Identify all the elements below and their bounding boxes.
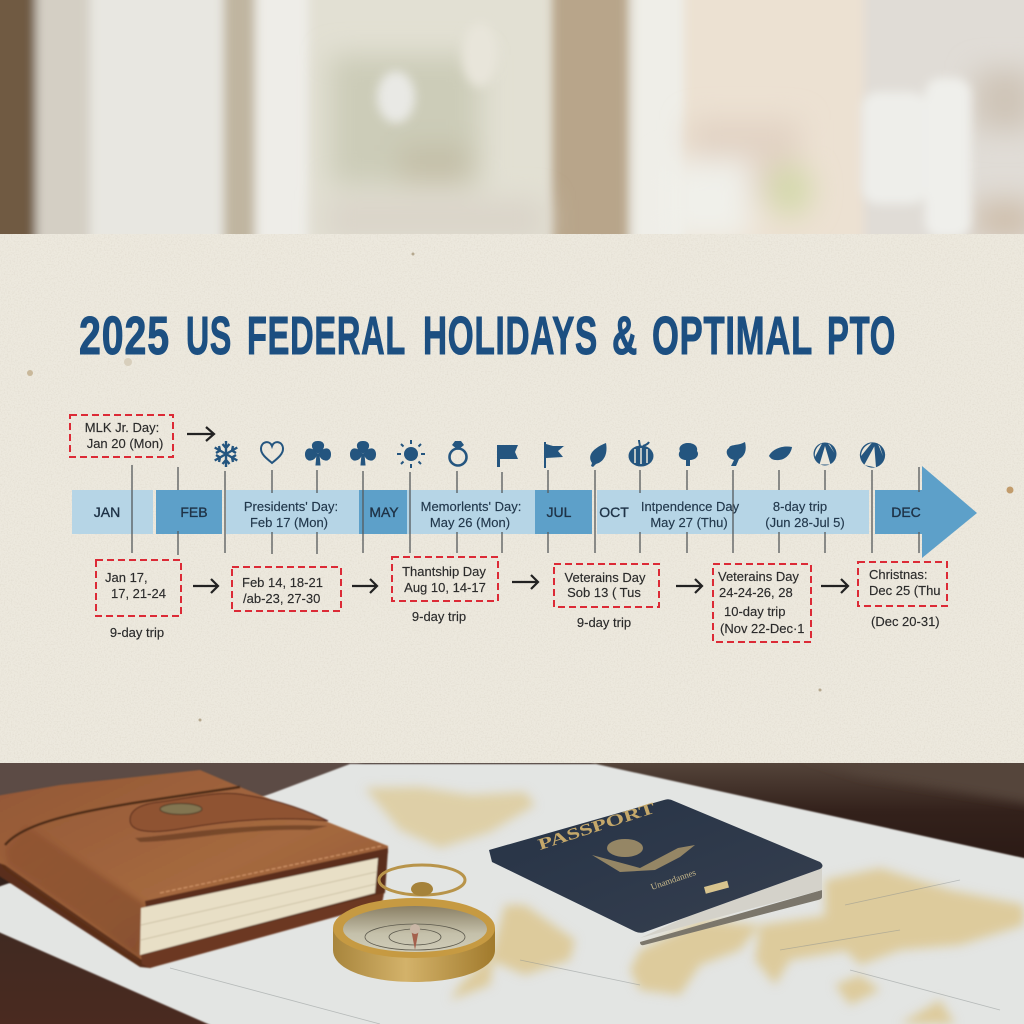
label: 9-day trip: 9-day trip xyxy=(412,609,466,624)
title: 2025 xyxy=(79,307,170,366)
callout: Thanksgiving xyxy=(392,557,498,601)
callout: Christmas: Dec 25 (Thu xyxy=(869,583,941,598)
segment: OCT and Independence Day: Intpendence Day xyxy=(641,499,740,514)
icon: pennant flag xyxy=(544,442,564,468)
callout: MLK Jr. Day: Jan 20 (Mon) xyxy=(87,436,163,451)
callout: February dates xyxy=(232,567,341,611)
segment: MAY: MAY xyxy=(369,504,399,520)
callout: Veterans Day: Veterains Day xyxy=(565,570,646,585)
callout: February dates: /ab-23, 27-30 xyxy=(243,591,320,606)
title: HOLIDAYS xyxy=(423,307,598,366)
segment: OCT and Independence Day: OCT xyxy=(599,504,629,520)
photo: blurred window background xyxy=(0,0,1024,260)
icon: flag xyxy=(497,445,518,467)
segment: JAN xyxy=(72,490,153,534)
icon: ring xyxy=(450,441,466,466)
callout: February dates: Feb 14, 18-21 xyxy=(242,575,323,590)
callout: Veterans Day 10-day trip: 24-24-26, 28 xyxy=(719,585,793,600)
callout: Veterans Day 10-day trip xyxy=(713,564,811,642)
segment: Presidents' Day xyxy=(226,490,359,534)
compass xyxy=(333,865,495,982)
arrow xyxy=(512,575,538,589)
segment: DEC arrow: DEC xyxy=(891,504,921,520)
notebook xyxy=(0,770,388,968)
callout: MLK Jr. Day xyxy=(70,415,173,457)
callout: January dates xyxy=(96,560,181,616)
segment: OCT and Independence Day: (Jun 28-Jul 5) xyxy=(765,515,845,530)
passport xyxy=(489,799,822,945)
callout: Christmas xyxy=(858,562,947,606)
callout: Thanksgiving: Thantship Day xyxy=(402,564,486,579)
segment: JUL: JUL xyxy=(547,504,572,520)
icon: sun xyxy=(397,440,425,468)
photo: travel desk scene xyxy=(0,755,1024,1024)
icon: beach ball xyxy=(814,442,836,466)
title: & xyxy=(612,307,638,366)
segment: OCT and Independence Day: May 27 (Thu) xyxy=(650,515,728,530)
title: PTO xyxy=(827,307,896,366)
callout: Veterans Day 10-day trip: Veterains Day xyxy=(718,569,799,584)
icon: tree xyxy=(679,443,698,466)
callout: Veterans Day 10-day trip: (Nov 22-Dec·1 xyxy=(720,621,805,636)
icon: heart xyxy=(261,442,283,463)
icon row xyxy=(215,440,888,470)
icon: clover xyxy=(305,441,331,465)
timeline bar with month segments xyxy=(72,466,977,558)
segment: Memorial Day: May 26 (Mon) xyxy=(430,515,510,530)
title: FEDERAL xyxy=(247,307,406,366)
icon: leaf xyxy=(590,443,607,467)
passport subtitle: Unamdannes xyxy=(649,867,698,892)
icon: flat leaf xyxy=(769,446,792,460)
title: US xyxy=(186,307,232,366)
callout: MLK Jr. Day: MLK Jr. Day: xyxy=(85,420,159,435)
connector lines xyxy=(132,465,919,555)
segment: Presidents' Day: Presidents' Day: xyxy=(244,499,338,514)
label: 9-day trip: 9-day trip xyxy=(110,625,164,640)
arrow xyxy=(187,427,214,441)
icon: beach ball xyxy=(857,440,888,470)
arrow xyxy=(352,579,377,593)
arrow xyxy=(676,579,702,593)
segment: MAY xyxy=(359,490,407,534)
map xyxy=(0,764,1024,1024)
title: OPTIMAL xyxy=(652,307,813,366)
callout: January dates: 17, 21-24 xyxy=(111,586,166,601)
segment: OCT and Independence Day: 8-day trip xyxy=(773,499,827,514)
callout: Christmas: Christnas: xyxy=(869,567,928,582)
callout: Veterans Day: Sob 13 ( Tus xyxy=(567,585,641,600)
segment: DEC arrow xyxy=(875,466,977,558)
icon: snowflake xyxy=(215,441,237,467)
segment: OCT and Independence Day xyxy=(597,490,869,534)
segment: Memorial Day xyxy=(407,490,535,534)
label: Dec 20-31: (Dec 20-31) xyxy=(871,614,940,629)
segment: FEB xyxy=(156,490,222,534)
segment: FEB: FEB xyxy=(180,504,208,520)
segment: JAN: JAN xyxy=(94,504,120,520)
passport title: PASSPORT xyxy=(536,800,658,854)
icon: pumpkin xyxy=(628,440,654,466)
callout: Veterans Day xyxy=(554,564,659,607)
callout: January dates: Jan 17, xyxy=(105,570,148,585)
segment: JUL xyxy=(535,490,592,534)
callout: Thanksgiving: Aug 10, 14-17 xyxy=(404,580,486,595)
title xyxy=(79,307,896,366)
panel: paper timeline background xyxy=(0,234,1024,763)
arrow xyxy=(821,579,848,593)
label: 9-day trip: 9-day trip xyxy=(577,615,631,630)
icon: clover xyxy=(350,441,376,465)
segment: Memorial Day: Memorlents' Day: xyxy=(421,499,521,514)
arrow xyxy=(193,579,218,593)
callout: Veterans Day 10-day trip: 10-day trip xyxy=(724,604,785,619)
segment: Presidents' Day: Feb 17 (Mon) xyxy=(250,515,328,530)
icon: oak leaf xyxy=(727,442,746,466)
